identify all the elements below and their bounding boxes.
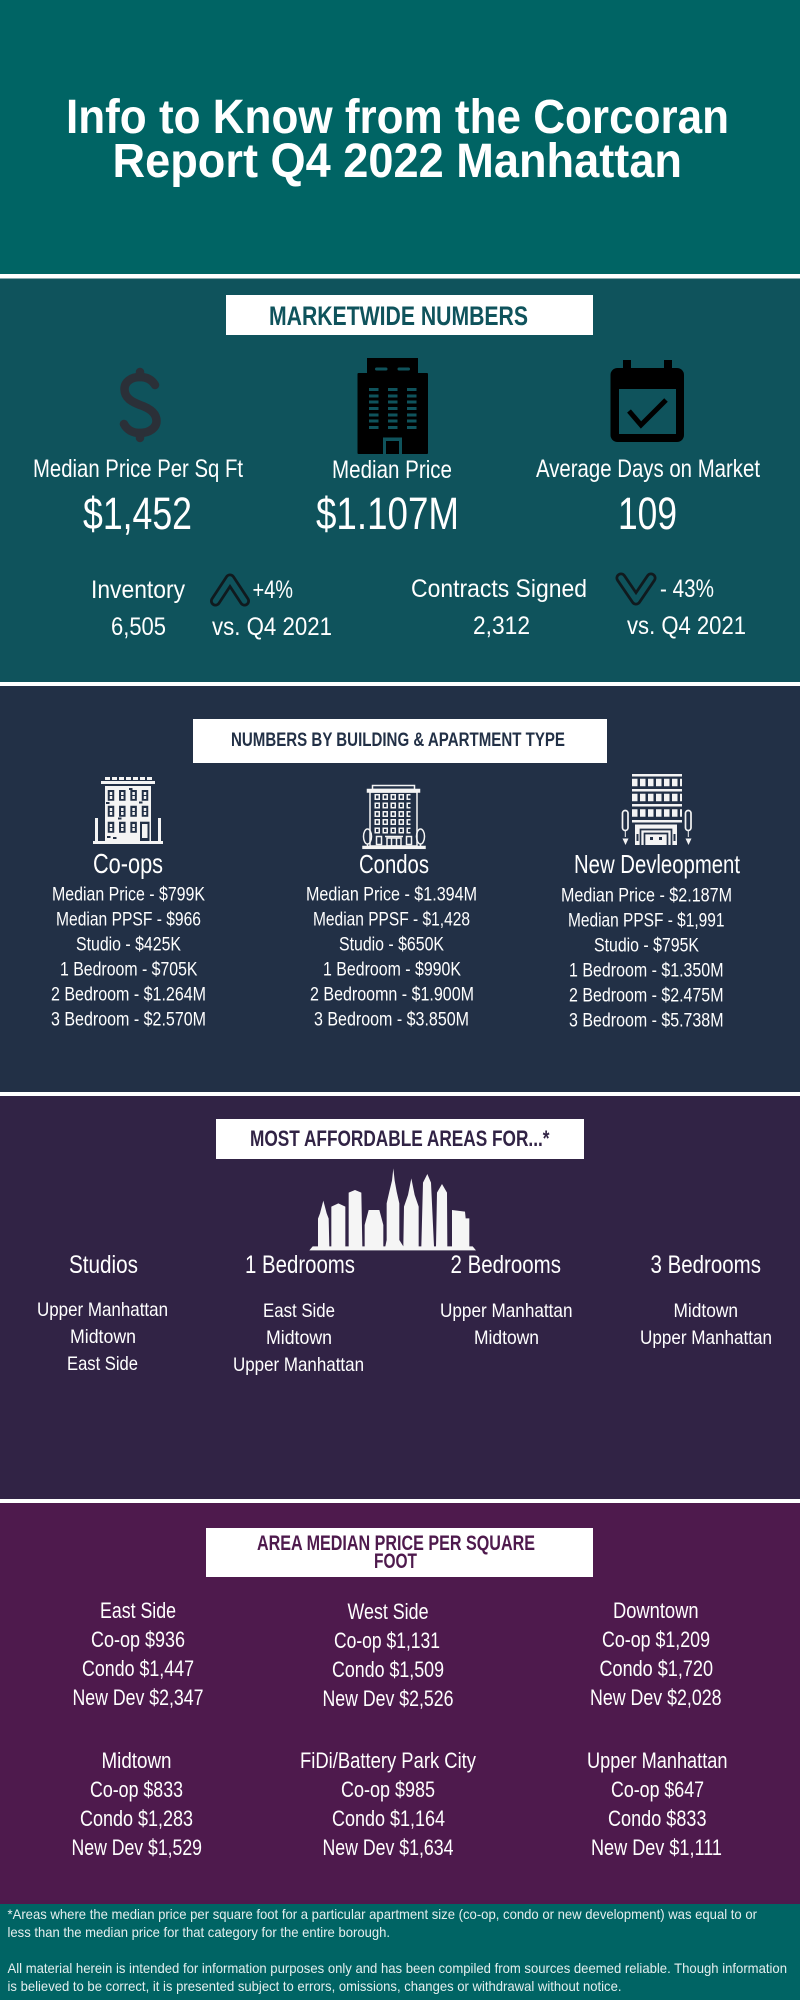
column: condos: 1 Bedroom - $990K bbox=[323, 959, 461, 981]
area: upper manhattan: Co-op $647 bbox=[611, 1777, 704, 1802]
area: downtown bbox=[590, 1598, 722, 1710]
stat: inventory change bbox=[212, 576, 332, 641]
area: fidi and battery park city bbox=[300, 1748, 476, 1860]
column: 3 bedrooms: Midtown bbox=[674, 1300, 738, 1322]
column: 1 bedrooms bbox=[233, 1251, 364, 1376]
stat: inventory change: vs. Q4 2021 bbox=[212, 613, 332, 641]
column: studios: Upper Manhattan bbox=[37, 1299, 168, 1321]
column: studios: Midtown bbox=[70, 1326, 136, 1348]
stat: average days on market bbox=[536, 455, 760, 539]
icon: condo tower bbox=[363, 786, 425, 848]
icon: up chevron arrow bbox=[216, 579, 244, 601]
area: downtown: Co-op $1,209 bbox=[602, 1627, 710, 1652]
column: new development: Median PPSF - $1,991 bbox=[568, 910, 724, 932]
area: fidi and battery park city: FiDi/Battery Park City bbox=[300, 1748, 476, 1773]
area: upper manhattan: New Dev $1,111 bbox=[591, 1835, 722, 1860]
column: co-ops: Median Price - $799K bbox=[52, 884, 205, 906]
area: midtown: Midtown bbox=[102, 1748, 172, 1773]
area: west side: New Dev $2,526 bbox=[322, 1686, 454, 1711]
area: east side bbox=[72, 1598, 204, 1710]
heading: area median price per square foot: FOOT bbox=[374, 1550, 417, 1573]
area: west side: West Side bbox=[348, 1599, 428, 1624]
stat: median price: $1.107M bbox=[316, 488, 459, 539]
column: new development: New Devleopment bbox=[574, 849, 741, 879]
area: upper manhattan: Condo $833 bbox=[608, 1806, 706, 1831]
panel: most affordable areas bbox=[0, 1096, 800, 1499]
heading: numbers by building type: NUMBERS BY BUILDING & APARTMENT TYPE bbox=[231, 730, 565, 751]
icon: new development building bbox=[622, 774, 692, 845]
column: new development: 1 Bedroom - $1.350M bbox=[569, 960, 724, 982]
heading: area median price per square foot: AREA MEDIAN PRICE PER SQUARE bbox=[257, 1532, 535, 1555]
stat: contracts change: vs. Q4 2021 bbox=[627, 612, 746, 640]
heading: area median price per square foot bbox=[206, 1528, 593, 1577]
title: Report Q4 2022 Manhattan bbox=[112, 135, 682, 188]
area: fidi and battery park city: Condo $1,164 bbox=[332, 1806, 445, 1831]
stat: median price: Median Price bbox=[332, 456, 452, 484]
column: condos: Median Price - $1.394M bbox=[306, 884, 477, 906]
area: midtown: New Dev $1,529 bbox=[72, 1835, 202, 1860]
stat: median price per sq ft: Median Price Per Sq Ft bbox=[33, 455, 243, 483]
column: 3 bedrooms bbox=[640, 1251, 772, 1349]
column: new development: Median Price - $2.187M bbox=[561, 885, 732, 907]
stat: contracts change bbox=[627, 575, 746, 640]
column: studios bbox=[37, 1251, 168, 1375]
area: east side: East Side bbox=[100, 1598, 176, 1623]
column: condos: Studio - $650K bbox=[339, 934, 444, 956]
column: condos: 2 Bedroomn - $1.900M bbox=[310, 984, 474, 1006]
column: condos bbox=[306, 849, 477, 1031]
area: midtown bbox=[72, 1748, 202, 1860]
stat: inventory bbox=[91, 576, 185, 641]
column: co-ops: 2 Bedroom - $1.264M bbox=[51, 984, 206, 1006]
column: 1 bedrooms: East Side bbox=[263, 1300, 335, 1322]
panel: title header bbox=[0, 0, 800, 274]
column: new development: Studio - $795K bbox=[594, 935, 699, 957]
area: fidi and battery park city: Co-op $985 bbox=[341, 1777, 435, 1802]
heading: numbers by building type bbox=[193, 719, 607, 763]
stat: inventory: 6,505 bbox=[111, 613, 166, 641]
icon: co-op townhouse bbox=[93, 778, 163, 844]
stat: average days on market: 109 bbox=[618, 488, 677, 539]
column: condos: Condos bbox=[359, 849, 429, 879]
stat: median price per sq ft bbox=[33, 455, 243, 539]
icon: manhattan skyline bbox=[309, 1168, 476, 1250]
icon: down chevron arrow bbox=[621, 578, 651, 600]
stat: median price per sq ft: $1,452 bbox=[83, 488, 192, 539]
column: co-ops: 1 Bedroom - $705K bbox=[60, 959, 198, 981]
stat: median price bbox=[316, 456, 459, 539]
column: 2 bedrooms bbox=[440, 1251, 572, 1349]
area: east side: Condo $1,447 bbox=[82, 1656, 194, 1681]
stat: inventory change: +4% bbox=[252, 576, 293, 604]
icon: dollar sign bbox=[124, 372, 156, 438]
stat: contracts change: - 43% bbox=[660, 575, 714, 603]
column: 3 bedrooms: Upper Manhattan bbox=[640, 1327, 772, 1349]
stat: contracts signed: 2,312 bbox=[473, 612, 530, 640]
column: studios: Studios bbox=[69, 1251, 138, 1279]
column: 1 bedrooms: Upper Manhattan bbox=[233, 1354, 364, 1376]
column: 2 bedrooms: Midtown bbox=[474, 1327, 539, 1349]
column: co-ops: Median PPSF - $966 bbox=[56, 909, 201, 931]
area: downtown: New Dev $2,028 bbox=[590, 1685, 722, 1710]
area: east side: New Dev $2,347 bbox=[72, 1685, 204, 1710]
area: west side bbox=[322, 1599, 454, 1711]
panel: footnotes and disclaimer: less than the median price for that category for the entire borough. bbox=[8, 1924, 390, 1940]
column: studios: East Side bbox=[67, 1353, 138, 1375]
stat: inventory: Inventory bbox=[91, 576, 185, 604]
column: 1 bedrooms: Midtown bbox=[266, 1327, 332, 1349]
column: new development: 3 Bedroom - $5.738M bbox=[569, 1010, 724, 1032]
heading: most affordable areas bbox=[216, 1119, 584, 1159]
column: new development bbox=[561, 849, 741, 1032]
icon: calendar check bbox=[610, 360, 684, 442]
column: co-ops bbox=[51, 848, 206, 1031]
column: co-ops: Co-ops bbox=[93, 848, 163, 879]
panel: footnotes and disclaimer: is believed to be correct, it is presented subject to errors, omissions, changes or withdrawal without notice. bbox=[8, 1978, 622, 1994]
panel: footnotes and disclaimer: *Areas where the median price per square foot for a particular apartment size (co-op, condo or new development) was equal to or bbox=[8, 1906, 757, 1922]
heading: marketwide numbers: MARKETWIDE NUMBERS bbox=[269, 301, 528, 331]
column: condos: Median PPSF - $1,428 bbox=[313, 909, 470, 931]
panel: area median price per square foot bbox=[0, 1503, 800, 1904]
column: 3 bedrooms: 3 Bedrooms bbox=[650, 1251, 761, 1279]
column: 2 bedrooms: 2 Bedrooms bbox=[450, 1251, 561, 1279]
area: east side: Co-op $936 bbox=[91, 1627, 185, 1652]
area: upper manhattan bbox=[587, 1748, 728, 1860]
column: co-ops: 3 Bedroom - $2.570M bbox=[51, 1009, 206, 1031]
area: downtown: Condo $1,720 bbox=[600, 1656, 713, 1681]
area: midtown: Co-op $833 bbox=[90, 1777, 183, 1802]
panel: marketwide numbers bbox=[0, 278, 800, 682]
column: 1 bedrooms: 1 Bedrooms bbox=[245, 1251, 355, 1279]
column: 2 bedrooms: Upper Manhattan bbox=[440, 1300, 572, 1322]
area: midtown: Condo $1,283 bbox=[80, 1806, 193, 1831]
stat: contracts signed bbox=[411, 575, 587, 640]
heading: marketwide numbers bbox=[226, 295, 593, 335]
panel: footnotes and disclaimer bbox=[0, 1904, 800, 2000]
title: Info to Know from the Corcoran bbox=[66, 91, 729, 144]
panel: numbers by building and apartment type bbox=[0, 686, 800, 1092]
area: downtown: Downtown bbox=[613, 1598, 698, 1623]
area: upper manhattan: Upper Manhattan bbox=[587, 1748, 728, 1773]
icon: office building bbox=[358, 358, 428, 454]
heading: most affordable areas: MOST AFFORDABLE AREAS FOR...* bbox=[250, 1126, 550, 1151]
title bbox=[66, 91, 729, 188]
stat: contracts signed: Contracts Signed bbox=[411, 575, 587, 603]
area: west side: Co-op $1,131 bbox=[334, 1628, 440, 1653]
column: condos: 3 Bedroom - $3.850M bbox=[314, 1009, 469, 1031]
column: new development: 2 Bedroom - $2.475M bbox=[569, 985, 724, 1007]
column: co-ops: Studio - $425K bbox=[76, 934, 181, 956]
area: west side: Condo $1,509 bbox=[332, 1657, 444, 1682]
area: fidi and battery park city: New Dev $1,634 bbox=[322, 1835, 454, 1860]
